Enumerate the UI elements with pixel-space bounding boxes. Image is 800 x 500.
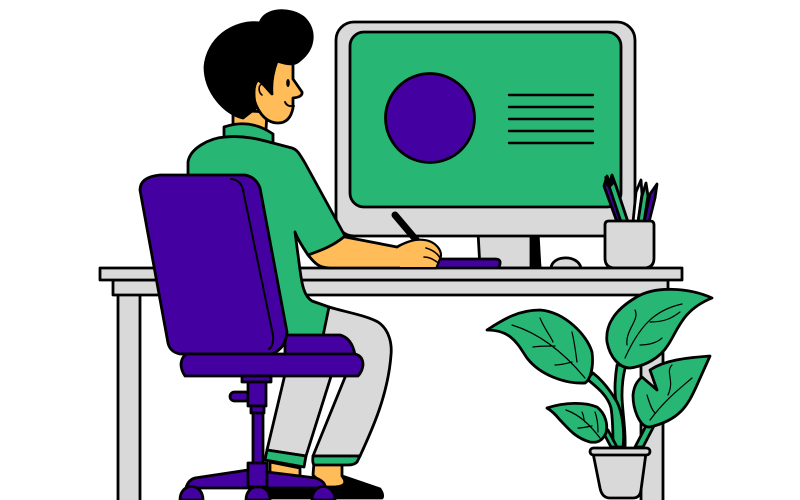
chair hub — [248, 463, 267, 487]
arm — [308, 236, 441, 268]
screen circle — [386, 74, 474, 162]
neck — [233, 110, 267, 130]
ear detail — [259, 84, 263, 95]
mouse — [551, 258, 581, 268]
office chair — [140, 175, 363, 500]
left desk leg — [118, 290, 140, 500]
leaf top — [607, 289, 712, 368]
chair lever — [230, 392, 250, 401]
chair backrest — [140, 175, 287, 354]
chair cushion — [285, 335, 355, 355]
trouser cuffs — [265, 450, 360, 467]
shoes — [268, 462, 383, 498]
pencil tips — [605, 176, 615, 186]
monitor screen — [350, 32, 621, 207]
leaf small — [547, 403, 607, 442]
hair — [205, 11, 312, 118]
pencil purple — [604, 176, 624, 222]
stylus — [395, 215, 417, 241]
pencil green right — [638, 183, 648, 222]
desk top — [100, 268, 682, 295]
chair column — [242, 376, 271, 465]
monitor casing — [336, 22, 635, 236]
hand outline — [398, 240, 441, 268]
pencil cup — [605, 221, 654, 268]
face — [252, 55, 302, 123]
pencil green — [609, 175, 628, 222]
screen text lines — [509, 95, 593, 143]
monitor — [336, 22, 635, 268]
pencils in cup — [604, 175, 657, 222]
leaf left — [487, 310, 593, 383]
leaf right — [633, 356, 710, 427]
chair seat — [181, 354, 363, 376]
drawing tablet — [436, 259, 500, 269]
plant — [487, 289, 712, 498]
right desk leg — [641, 290, 663, 500]
desk under panel — [113, 280, 668, 295]
pencil purple right — [644, 184, 657, 222]
trousers — [267, 307, 391, 456]
shirt body — [188, 137, 345, 336]
eye — [286, 79, 290, 87]
desk surface — [100, 268, 682, 280]
chair wheels — [180, 486, 335, 500]
pencil white — [633, 180, 642, 222]
plant pot — [590, 448, 650, 498]
chair base arms — [186, 470, 325, 488]
plant stems — [587, 365, 655, 447]
smile — [285, 102, 294, 106]
monitor stand — [478, 232, 540, 268]
person — [188, 11, 441, 498]
shirt collar — [224, 124, 273, 146]
hand — [398, 240, 441, 267]
backrest seam — [231, 179, 273, 349]
